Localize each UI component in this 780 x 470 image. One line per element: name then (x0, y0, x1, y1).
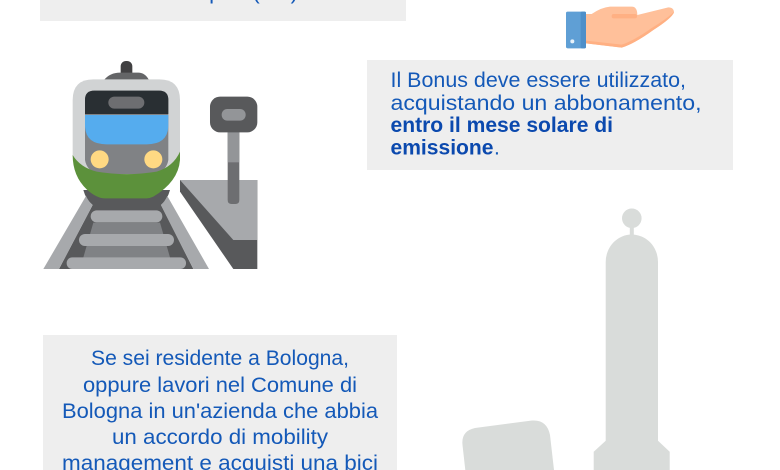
icon: open hand with blue cuff (566, 7, 674, 48)
panel: residents text (cropped): Se sei residente a Bologna, (91, 347, 349, 370)
train roof and antenna (104, 61, 149, 80)
panel: residents text (cropped): un accordo di mobility (112, 426, 329, 449)
panel: bonus usage text: entro il mese solare di (390, 114, 613, 137)
panel: bonus usage text: . (494, 136, 500, 160)
platform (180, 180, 257, 269)
panel: bonus usage text: acquistando un abbonamento, (390, 92, 702, 115)
panel: bonus usage text: Il Bonus deve essere utilizzato, (390, 69, 686, 92)
panel: residents text (cropped): oppure lavori nel Comune di (83, 374, 357, 397)
panel: bonus usage text (367, 60, 733, 170)
station sign (210, 97, 257, 204)
icon: Bologna tower silhouette (594, 208, 670, 470)
icon: leaning tower silhouette (462, 420, 554, 470)
panel: top text box (cropped) (40, 0, 406, 21)
panel: residents text (cropped) (43, 335, 397, 470)
track (43, 190, 209, 269)
panel: bonus usage text: emissione (390, 136, 494, 160)
train body (73, 79, 180, 198)
panel: residents text (cropped): Bologna in un'azienda che abbia (62, 400, 378, 423)
icon: train at station (43, 61, 257, 269)
